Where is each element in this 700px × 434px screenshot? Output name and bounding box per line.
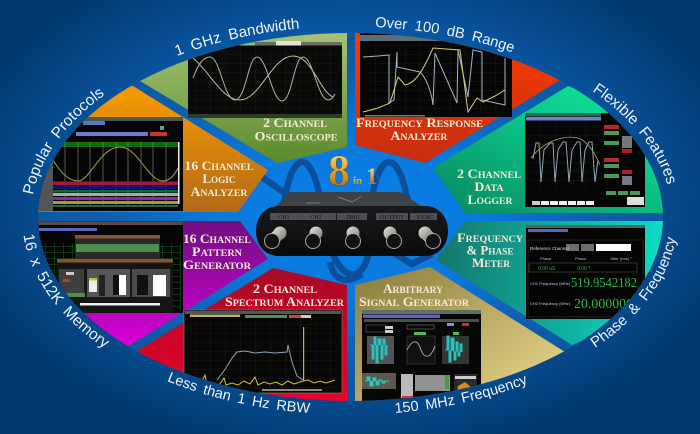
central blue ellipse bbox=[38, 33, 663, 401]
signal generator label: Arbitrary bbox=[383, 282, 444, 296]
frequency meter screen: Phase bbox=[540, 256, 552, 261]
oscilloscope label: Oscilloscope bbox=[254, 130, 338, 144]
feature label: Less than 1 Hz RBW: Less than 1 Hz RBW bbox=[168, 372, 310, 413]
title: 8 in 1: 8 bbox=[328, 146, 350, 195]
frequency meter screen: 519.9542182 bbox=[571, 275, 637, 290]
frequency meter screen: Jitter (rms) ° bbox=[610, 256, 632, 261]
channel label strip: SYNC bbox=[417, 215, 433, 221]
channel label strip: TRIG bbox=[346, 215, 361, 221]
BNC connector OUTPUT bbox=[384, 226, 402, 248]
data logger label bbox=[457, 167, 521, 207]
BNC connector SYNC bbox=[418, 226, 440, 248]
title: 8 in 1 bbox=[328, 146, 378, 195]
feature label: 1 GHz Bandwidth: 1 GHz Bandwidth bbox=[175, 18, 299, 56]
spectrum analyzer label: Spectrum Analyzer bbox=[225, 295, 345, 309]
BNC connector CH2 bbox=[306, 226, 322, 248]
oscilloscope screen bbox=[188, 41, 342, 118]
title: 8 in 1: in bbox=[353, 175, 362, 187]
frequency meter screen bbox=[526, 225, 645, 319]
frequency meter screen: 0.00 uS bbox=[538, 266, 556, 272]
frequency meter screen: Phase bbox=[575, 256, 587, 261]
spectrum analyzer label bbox=[225, 282, 345, 309]
frequency meter label: Frequency bbox=[457, 231, 524, 245]
pattern generator label: Pattern bbox=[192, 245, 243, 259]
signal generator screen bbox=[362, 310, 481, 405]
device front body bbox=[256, 206, 448, 256]
panel: 2 channel data logger bbox=[433, 86, 680, 213]
panel: arbitrary signal generator bbox=[355, 267, 564, 401]
panel: 2 channel spectrum analyzer bbox=[137, 268, 347, 401]
channel label strip: CH1 bbox=[278, 215, 290, 221]
feature label: Over 100 dB Range: Over 100 dB Range bbox=[376, 17, 514, 52]
device top bevel bbox=[275, 192, 423, 207]
panel: frequency and phase meter bbox=[436, 221, 680, 345]
data logger label: 2 Channel bbox=[457, 167, 521, 181]
feature label: 150 MHz Frequency: 150 MHz Frequency bbox=[396, 376, 526, 413]
oscilloscope label bbox=[254, 116, 338, 144]
spectrum analyzer label: 2 Channel bbox=[253, 282, 317, 296]
data logger screen bbox=[525, 113, 645, 207]
frequency response label bbox=[356, 116, 483, 143]
sine wave behind device bbox=[240, 162, 432, 280]
frequency meter label bbox=[457, 231, 524, 270]
panel: 16 channel pattern generator bbox=[20, 221, 268, 346]
frequency meter screen: Reference Channel bbox=[530, 246, 569, 251]
frequency meter screen: CH1 Frequency (MHz) bbox=[530, 281, 571, 286]
channel label strip bbox=[270, 213, 437, 221]
logic analyzer screen bbox=[38, 117, 183, 211]
frequency response label: Frequency Response bbox=[356, 116, 483, 130]
pattern generator label: 16 Channel bbox=[183, 232, 251, 246]
feature label: Flexible Features: Flexible Features bbox=[593, 83, 674, 184]
pattern generator label: Generator bbox=[183, 258, 252, 272]
channel label strip: OUTPUT bbox=[380, 215, 404, 221]
spectrum analyzer screen bbox=[184, 310, 342, 393]
logic analyzer label bbox=[184, 159, 254, 199]
feature label: Phase & Frequency: Phase & Frequency bbox=[590, 236, 678, 348]
frequency meter screen: CH2 Frequency (MHz) bbox=[530, 301, 571, 306]
panel: 2 channel oscilloscope bbox=[140, 20, 347, 163]
logic analyzer label: 16 Channel bbox=[184, 159, 254, 173]
frequency meter screen: 20.0000000 bbox=[574, 296, 640, 311]
frequency meter label: & Phase bbox=[466, 244, 514, 258]
title: 8 in 1: 1 bbox=[366, 164, 378, 189]
logic analyzer label: Analyzer bbox=[190, 185, 248, 199]
device: 8-in-1 instrument bbox=[256, 192, 448, 256]
signal generator label: Signal Generator bbox=[359, 295, 470, 309]
pattern generator label bbox=[183, 232, 252, 272]
panel: frequency response analyzer bbox=[355, 20, 560, 163]
panel: 16 channel logic analyzer bbox=[20, 86, 268, 212]
feature label: Popular Protocols: Popular Protocols bbox=[22, 89, 104, 194]
BNC connector CH1 bbox=[264, 226, 286, 248]
channel label strip: CH2 bbox=[310, 215, 322, 221]
data logger label: Data bbox=[474, 180, 504, 194]
BNC connector TRIG bbox=[346, 226, 360, 248]
frequency meter screen: 0.00 ° bbox=[577, 266, 590, 272]
frequency meter label: Meter bbox=[472, 256, 511, 270]
frequency response label: Analyzer bbox=[390, 129, 448, 143]
pattern generator screen bbox=[38, 222, 183, 313]
oscilloscope label: 2 Channel bbox=[263, 116, 327, 130]
feature label: 16 x 512K Memory: 16 x 512K Memory bbox=[24, 234, 110, 348]
logic analyzer label: Logic bbox=[202, 172, 236, 186]
data logger label: Logger bbox=[468, 193, 513, 207]
frequency response screen bbox=[360, 33, 512, 117]
signal generator label bbox=[359, 282, 470, 309]
